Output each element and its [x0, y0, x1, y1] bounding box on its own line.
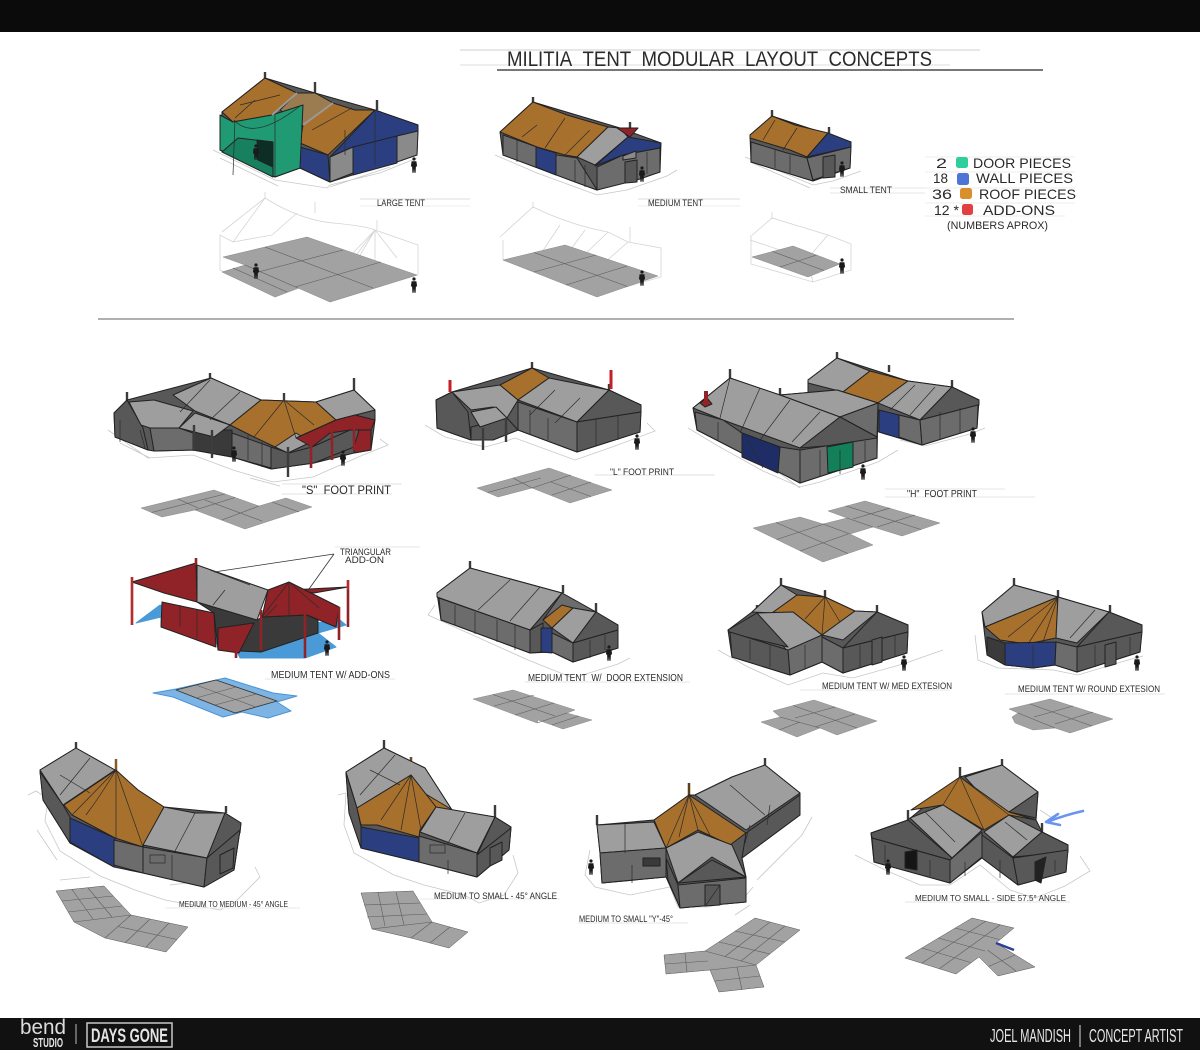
footer separator [76, 1024, 77, 1044]
illustration: H footprint tent [688, 352, 985, 488]
label: L footprint [595, 467, 715, 478]
floor plan: Y tent [664, 918, 800, 992]
panel: medium tent with round extension [975, 578, 1165, 733]
label: door extension: MEDIUM TENT W/ DOOR EXTENSION [528, 673, 683, 684]
legend: 12 * [934, 202, 960, 218]
illustration: large tent [213, 72, 418, 188]
illustration: medium to small tent [338, 740, 518, 903]
floor plan: med extension [761, 700, 877, 737]
legend: 2 [936, 155, 947, 171]
panel: large tent [213, 72, 470, 302]
panel: medium to small side 57.5 [855, 759, 1090, 976]
panel: medium tent with add-ons [132, 547, 420, 718]
panel: medium to small Y [578, 758, 812, 992]
panel: small tent [745, 110, 925, 282]
legend: (NUMBERS APROX) [947, 220, 1048, 232]
floor plan: S footprint [141, 490, 312, 529]
label: large tent: LARGE TENT [377, 198, 425, 208]
logo: bend studio [20, 1016, 66, 1050]
label: medium tent [638, 198, 740, 208]
panel: medium tent with door extension [428, 561, 690, 729]
illustration: S footprint tent [108, 373, 388, 486]
panel: medium to small 45 [338, 740, 560, 948]
icon: blue arrow [1046, 811, 1083, 825]
top black band [0, 0, 1200, 32]
legend: 36 [932, 186, 952, 202]
logo: days gone [87, 1023, 172, 1047]
logo: days gone: DAYS GONE [91, 1026, 168, 1047]
legend: WALL PIECES [976, 170, 1073, 186]
floor plan: door extension [473, 690, 592, 729]
legend: ROOF PIECES [979, 186, 1076, 202]
section divider [98, 318, 1014, 320]
panel: medium to medium 45 [28, 742, 300, 952]
label: H footprint [885, 489, 1035, 500]
floor plan: round extension [1009, 699, 1113, 733]
label: large tent [360, 198, 470, 208]
label: H footprint: "H" FOOT PRINT [907, 489, 977, 500]
label: medium to medium: MEDIUM TO MEDIUM - 45° ANGLE [179, 900, 288, 909]
legend: ADD-ONS [983, 202, 1055, 218]
label: Y tent: MEDIUM TO SMALL "Y"-45° [579, 914, 673, 925]
legend: DOOR PIECES [973, 155, 1071, 171]
sketch: small tent wireframe and floor plan [750, 212, 851, 282]
illustration: tent with red add-ons [132, 558, 348, 658]
footer band [0, 1016, 1200, 1050]
label: add-ons: MEDIUM TENT W/ ADD-ONS [271, 670, 390, 681]
credit: artist [990, 1025, 1183, 1047]
panel: L footprint [425, 362, 715, 503]
title: MILITIA TENT MODULAR LAYOUT CONCEPTS [507, 48, 932, 71]
legend: 18 [933, 170, 948, 186]
legend [925, 155, 1076, 232]
illustration: small tent [745, 110, 861, 188]
floor plan: side tent [905, 918, 1035, 976]
sketch: medium tent wireframe and floor plan [500, 202, 661, 297]
callout: triangular add-on leaders: TRIANGULAR [340, 547, 391, 557]
illustration: round extension tent [975, 578, 1143, 675]
label: S footprint: "S" FOOT PRINT [302, 483, 392, 497]
panel: H footprint [688, 352, 1035, 562]
illustration: med extension tent [718, 578, 943, 685]
illustration: medium to medium tent [28, 742, 260, 910]
logo: bend studio: STUDIO [33, 1035, 63, 1050]
illustration: door extension tent [428, 561, 630, 678]
label: small tent [830, 185, 925, 195]
illustration: side tent [855, 759, 1090, 898]
panel: medium tent [495, 97, 740, 297]
label: round extension: MEDIUM TENT W/ ROUND EXTESION [1018, 684, 1160, 695]
floor plan: medium to medium [56, 886, 188, 952]
label: medium to small: MEDIUM TO SMALL - 45° ANGLE [434, 891, 557, 902]
label: L footprint: "L" FOOT PRINT [610, 467, 674, 478]
logo: bend studio: bend [20, 1016, 66, 1039]
panel: S footprint [108, 373, 402, 529]
callout: triangular add-on leaders: ADD-ON [345, 555, 384, 565]
illustration: medium tent [495, 97, 677, 195]
callout: triangular add-on leaders [214, 547, 420, 589]
floor plan: L footprint [477, 468, 612, 503]
label: med extension: MEDIUM TENT W/ MED EXTESION [822, 681, 952, 692]
floor plan: H footprint [753, 501, 940, 562]
illustration: Y tent [585, 758, 812, 915]
floor plan: add-ons [153, 678, 297, 718]
floor plan: medium to small [361, 891, 468, 948]
label: medium tent: MEDIUM TENT [648, 198, 703, 208]
label: side tent: MEDIUM TO SMALL - SIDE 57.5° ANGLE [915, 893, 1066, 903]
label: small tent: SMALL TENT [840, 185, 892, 195]
illustration: L footprint tent [425, 362, 655, 460]
sketch: large tent wireframe and floor plan [220, 192, 418, 302]
credit: artist: JOEL MANDISH [990, 1026, 1071, 1046]
panel: medium tent with med extension [718, 578, 952, 737]
